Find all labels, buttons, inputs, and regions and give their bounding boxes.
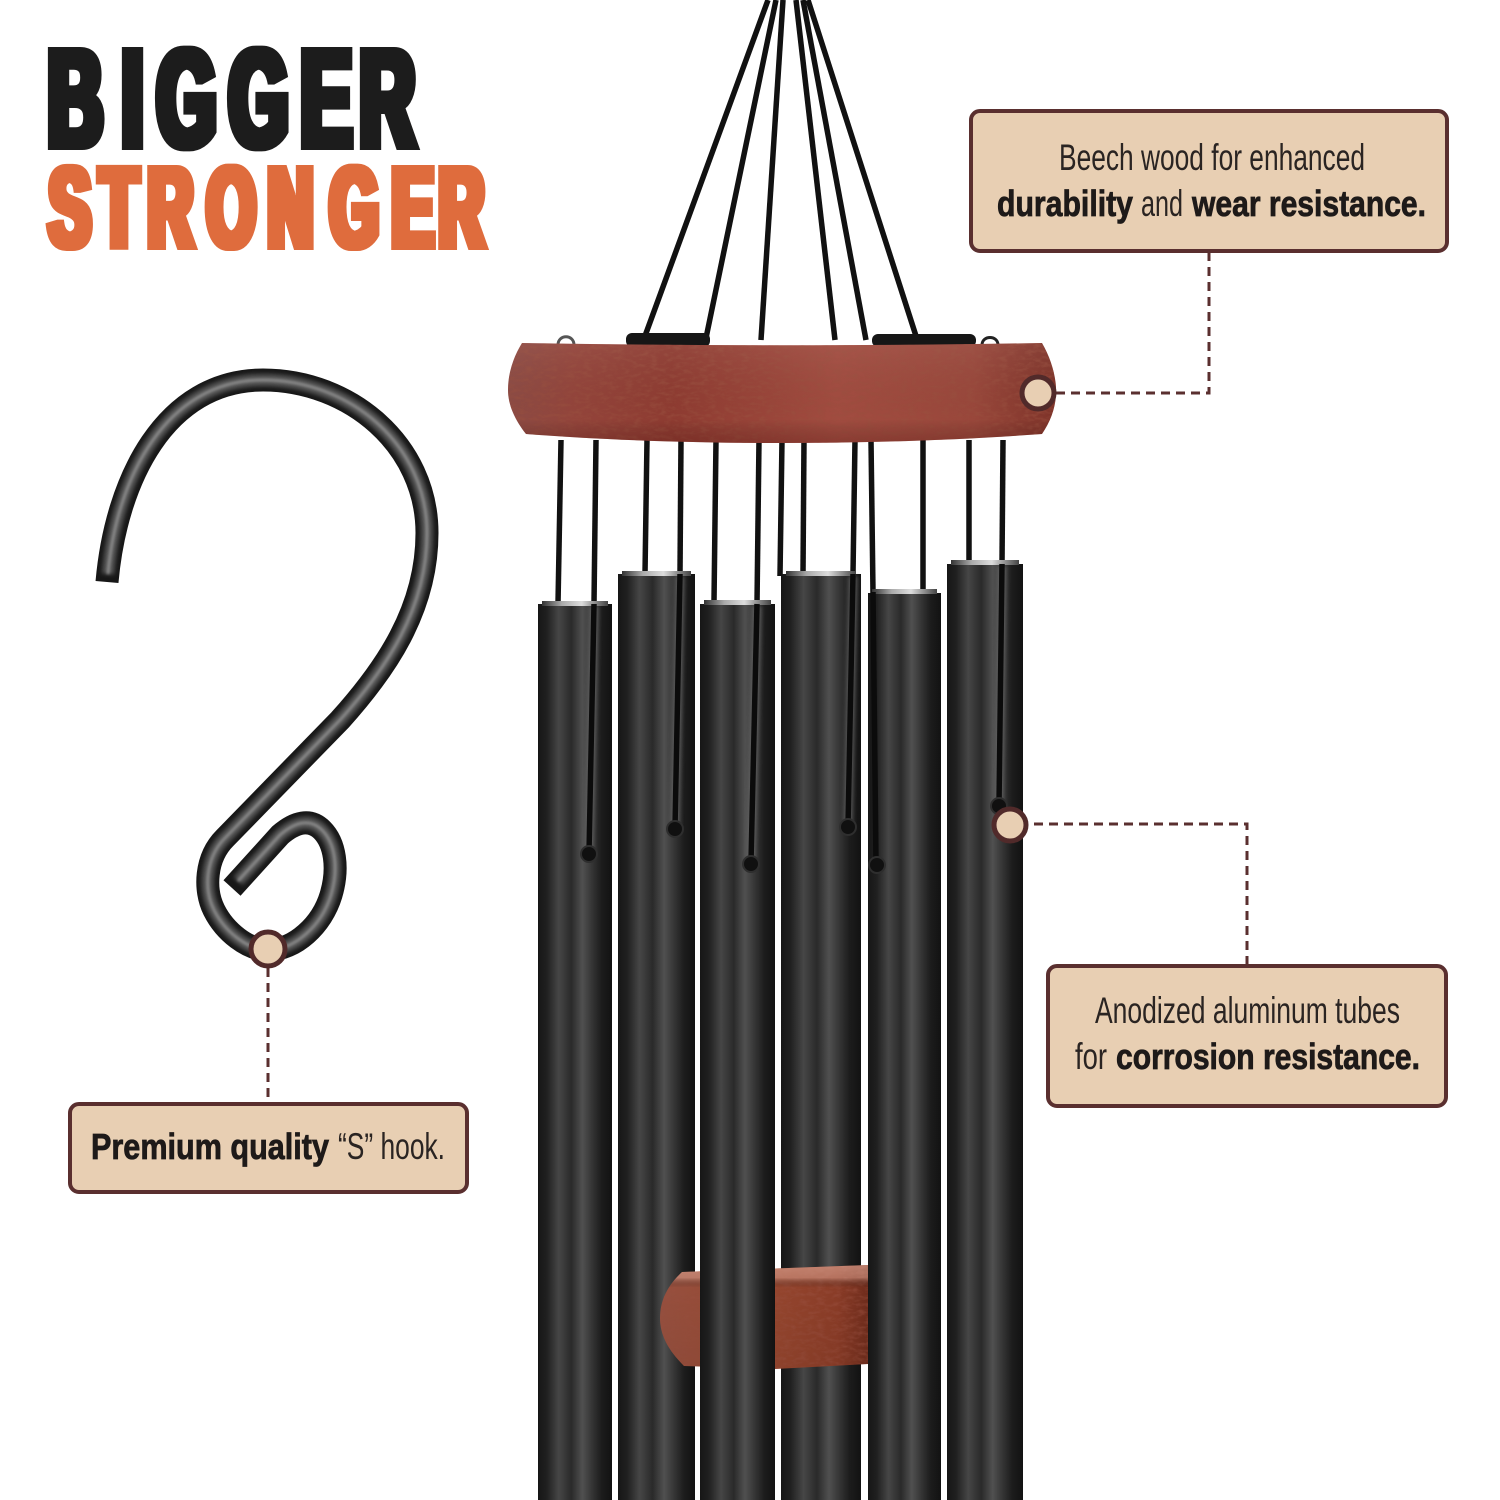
callout: aluminum tubes [994, 809, 1446, 1106]
callout text: Beech wood for enhanced [1059, 137, 1365, 178]
leader line [1056, 252, 1209, 393]
callout: beech wood [971, 111, 1447, 409]
callout box [971, 111, 1447, 251]
callout text [1075, 990, 1420, 1077]
wires under ring [558, 440, 1003, 604]
title [48, 21, 484, 271]
lower wooden striker [658, 1264, 870, 1370]
callout text: corrosion resistance. [1116, 1036, 1420, 1077]
callout box [1048, 966, 1446, 1106]
marker dot [1022, 377, 1054, 409]
heading: stronger: STRONGER [49, 145, 484, 271]
callout text: Premium quality [91, 1126, 329, 1167]
callout text: durability [997, 183, 1133, 224]
wooden ring [505, 340, 1060, 446]
leader line [1028, 824, 1247, 965]
tube 5 [868, 589, 941, 1500]
callout: s hook [70, 932, 467, 1192]
hanging cords [645, 0, 916, 340]
callout text: “S” hook. [338, 1126, 445, 1167]
marker dot [994, 809, 1026, 841]
ring fittings [558, 333, 998, 347]
leader line [266, 968, 270, 1103]
tube 3 [700, 600, 775, 1500]
marker dot [251, 932, 285, 966]
s hook [107, 380, 427, 950]
callout text: for [1075, 1036, 1107, 1077]
tubes in front [538, 560, 1023, 1500]
tube 6 [947, 560, 1023, 1500]
heading: bigger: BIGGER [48, 21, 415, 176]
callout box [70, 1104, 467, 1192]
callout text [997, 137, 1426, 224]
tube 1 [538, 601, 612, 1500]
callout text: wear resistance. [1191, 183, 1426, 224]
tubes behind lower wood [618, 571, 861, 1500]
callout text: and [1141, 183, 1183, 224]
